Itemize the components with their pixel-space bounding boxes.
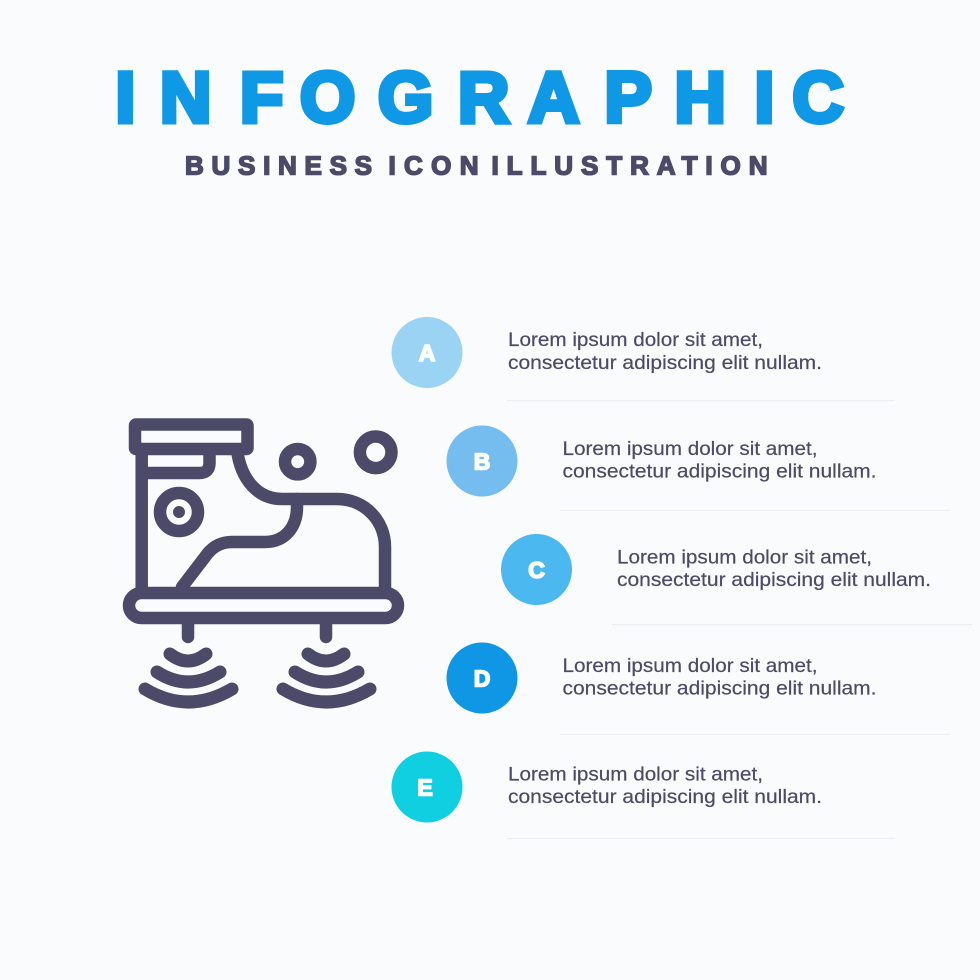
- item B: consectetur adipiscing elit nullam.: [562, 460, 876, 482]
- item A: [392, 317, 895, 400]
- item D: [446, 642, 950, 734]
- item D: Lorem ipsum dolor sit amet,: [562, 655, 818, 677]
- item E: [392, 752, 895, 838]
- item E: consectetur adipiscing elit nullam.: [508, 786, 822, 808]
- item A: consectetur adipiscing elit nullam.: [508, 352, 822, 374]
- item C: Lorem ipsum dolor sit amet,: [617, 546, 872, 568]
- item C: C: [528, 557, 545, 583]
- icon: smart shoe with sensors: [129, 424, 398, 702]
- title: INFOGRAPHIC: [116, 59, 844, 138]
- subtitle: [185, 150, 768, 180]
- item A: Lorem ipsum dolor sit amet,: [508, 329, 763, 351]
- item B: [446, 426, 950, 510]
- subtitle: BUSINESS: [185, 150, 372, 180]
- subtitle: ILLUSTRATION: [492, 150, 768, 180]
- item C: consectetur adipiscing elit nullam.: [617, 569, 931, 591]
- item A: A: [419, 340, 435, 366]
- subtitle: ICON: [388, 150, 478, 180]
- item E: E: [417, 774, 433, 800]
- item C: [501, 534, 972, 624]
- item B: Lorem ipsum dolor sit amet,: [562, 438, 818, 460]
- item B: B: [474, 448, 490, 474]
- item E: Lorem ipsum dolor sit amet,: [508, 764, 763, 786]
- item D: D: [474, 666, 490, 692]
- item D: consectetur adipiscing elit nullam.: [562, 678, 876, 700]
